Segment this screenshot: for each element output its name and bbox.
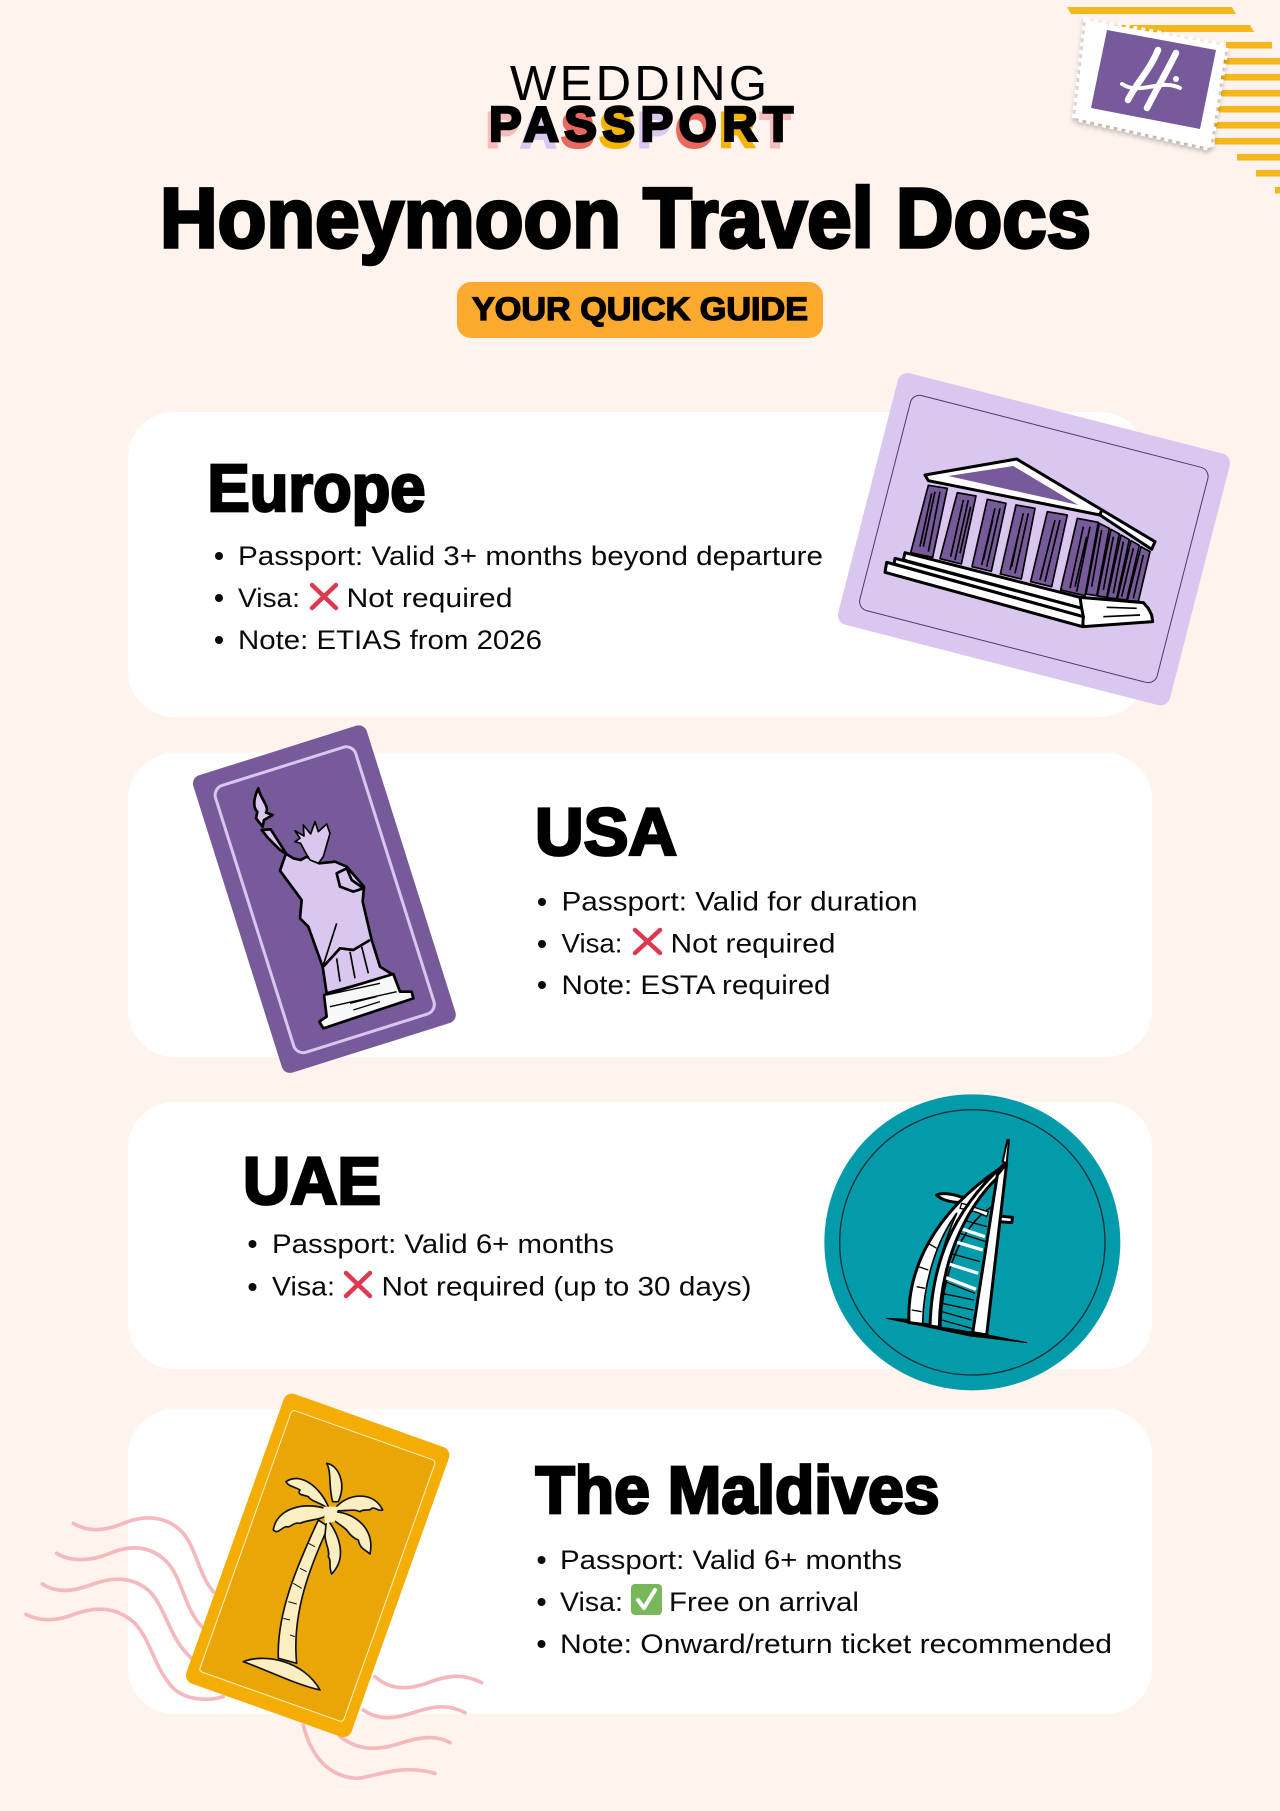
icon: burj al arab [887,1140,1027,1343]
card: Maldives palm [184,1391,452,1740]
icon: green check [631,1584,662,1615]
list: UAE requirements [248,1229,752,1302]
decorative stripes behind stamp [1067,7,1280,194]
list: USA requirements: Passport: Valid for duration [562,886,918,916]
list: USA requirements: Note: ESTA required [562,970,830,1000]
icon: palm tree [243,1463,383,1690]
heading: Europe: Europe [208,451,426,526]
list: Europe requirements: Passport: Valid 3+ months beyond departure [238,541,823,571]
list: Europe requirements: Note: ETIAS from 2026 [238,625,542,655]
heading: The Maldives: The Maldives [536,1453,940,1528]
list: UAE requirements: Not required (up to 30 days) [382,1272,752,1302]
list: Europe requirements: Visa: [238,583,300,613]
card: Europe temple [836,371,1232,708]
icon: temple [885,459,1155,627]
card: USA statue [191,723,458,1075]
logo: Wedding Passport: PASSPORT [486,104,790,158]
panel: Europe [128,412,1146,717]
card: UAE burj al arab [824,1094,1120,1390]
list: USA requirements: Not required [670,928,836,958]
list: Maldives requirements: Note: Onward/return ticket recommended [560,1629,1112,1659]
subtitle badge: YOUR QUICK GUIDE [472,291,808,327]
list: UAE requirements: Visa: [272,1272,335,1302]
panel: UAE [128,1102,1152,1369]
panel: The Maldives [128,1409,1152,1714]
heading: USA: USA [535,795,677,870]
list: USA requirements [538,886,918,1000]
heading: UAE: UAE [243,1144,381,1219]
panel: USA [128,753,1152,1057]
logo: Wedding Passport [486,57,793,158]
list: Maldives requirements: Visa: [560,1587,623,1617]
list: USA requirements: Visa: [562,928,622,958]
list: Maldives requirements: Passport: Valid 6+ months [560,1545,902,1575]
list: UAE requirements: Passport: Valid 6+ months [272,1229,614,1259]
icon: statue of liberty [254,788,413,1028]
list: Europe requirements: Not required [346,583,512,613]
stamp logo [1075,20,1226,148]
logo: Wedding Passport: WEDDING [510,57,767,111]
logo: Wedding Passport: PASSPORT [489,98,793,152]
list: Maldives requirements: Free on arrival [669,1587,859,1617]
postmark waves [26,1518,482,1778]
title: Honeymoon Travel Docs [160,171,1091,265]
list: Europe requirements [215,541,823,655]
list: Maldives requirements [538,1545,1112,1659]
subtitle badge [457,282,823,338]
